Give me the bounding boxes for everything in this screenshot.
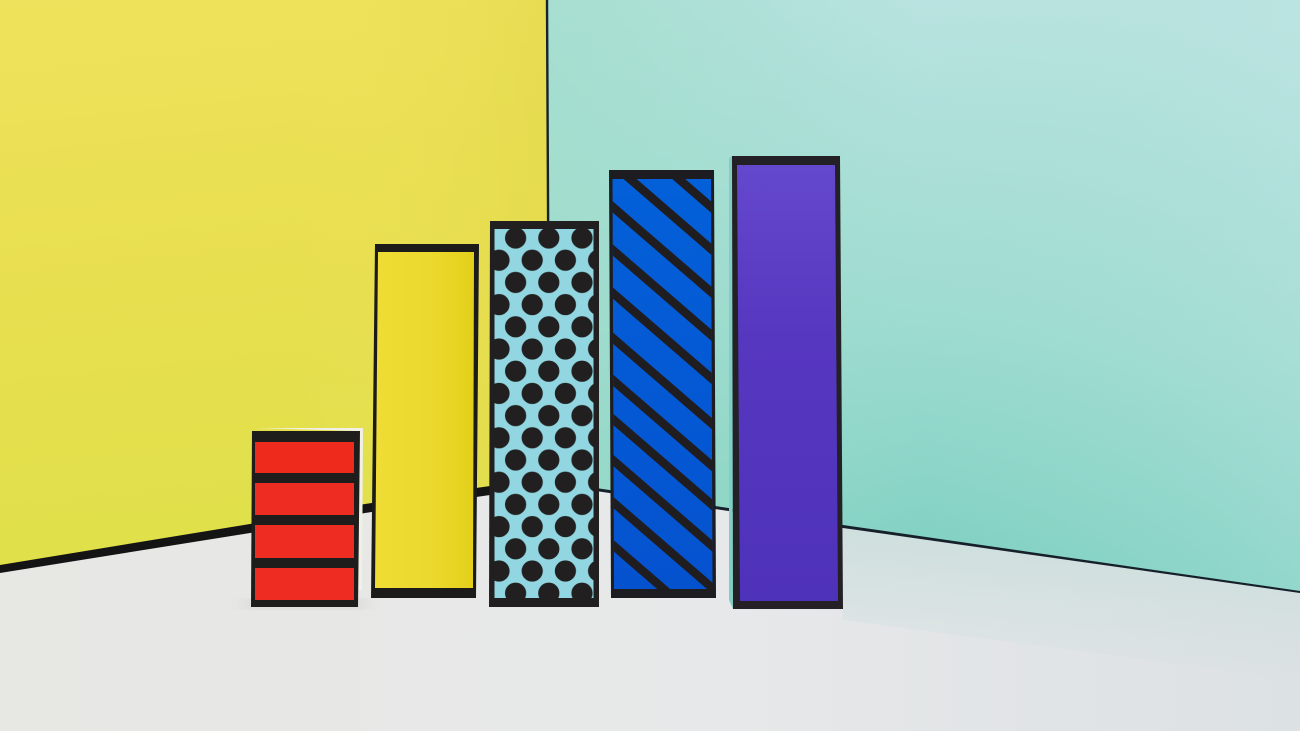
- white floor: [0, 482, 1300, 731]
- frame edges over dots: [490, 221, 494, 607]
- bar 4: blue diagonal striped block: [609, 170, 716, 598]
- wall corner line: [547, 0, 548, 300]
- bar 5: solid purple block: [729, 156, 843, 609]
- left floor edge line: [0, 486, 490, 573]
- red stripes: [255, 442, 354, 600]
- teal back wall: [548, 0, 1300, 600]
- bar 3: polka dot block: [489, 221, 599, 607]
- diagonal stripes: [612, 179, 712, 589]
- bar 1: red striped block: [240, 428, 370, 608]
- bar 2: solid yellow block: [371, 244, 479, 598]
- yellow back wall: [0, 0, 549, 600]
- right floor edge line: [596, 488, 1300, 593]
